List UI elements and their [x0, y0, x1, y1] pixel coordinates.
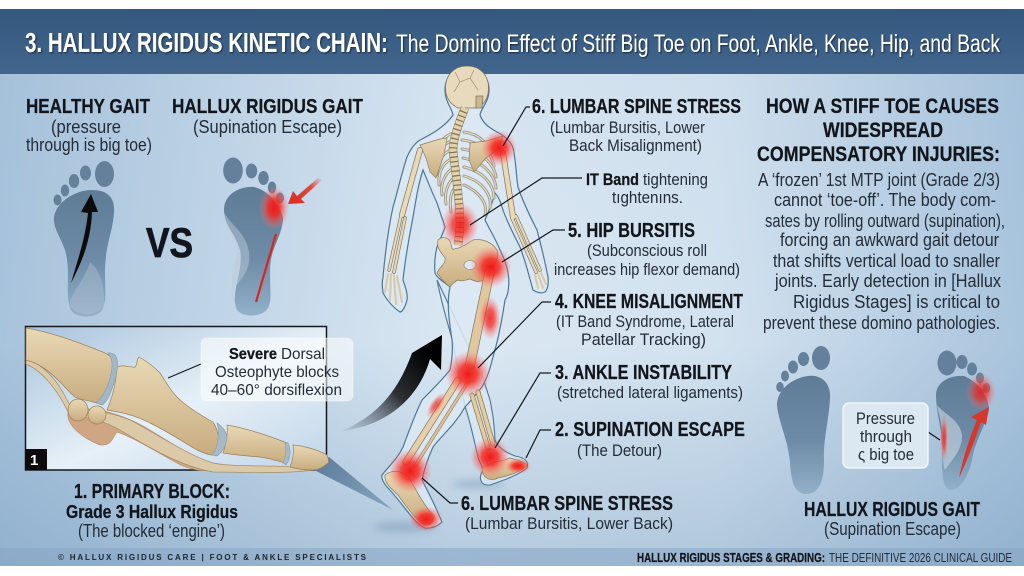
- icon: hot spot: [966, 373, 996, 411]
- text: primary block caption: [66, 481, 238, 541]
- icon: hot spot: [259, 186, 289, 230]
- title: 3. HALLUX RIGIDUS KINETIC CHAIN:: [25, 27, 388, 58]
- text block: explanation: cannot ‘toe-off’. The body com-: [774, 190, 996, 210]
- icon: pressure arrow: [71, 194, 98, 283]
- arrow: kinetic chain: [342, 335, 442, 431]
- footer bar: [0, 548, 1024, 566]
- ribcage: [437, 132, 496, 215]
- label: knee misalignment: (IT Band Syndrome, Lateral: [556, 312, 734, 331]
- text block: explanation: joints. Early detection in [Hallux: [774, 271, 1001, 291]
- foot bones front: [385, 471, 433, 525]
- text: primary block caption: (The blocked ‘engine’): [78, 521, 225, 541]
- heading: healthy gait: through is big toe): [26, 135, 152, 155]
- heading: how a stiff toe: WIDESPREAD: [823, 119, 943, 142]
- text block: explanation: that shifts vertical load to snaller: [773, 251, 1000, 271]
- spine: [453, 108, 465, 245]
- label: knee misalignment: [555, 291, 743, 349]
- wedge pointer: [314, 457, 393, 510]
- header banner: [0, 9, 1024, 74]
- text: lower foot caption: HALLUX RIGIDUS GAIT: [804, 499, 980, 521]
- leg bones: [406, 270, 493, 466]
- label: supination escape: (The Detour): [577, 441, 662, 460]
- heading: healthy gait: HEALTHY GAIT: [26, 96, 150, 118]
- label: it band: tıghtenıns.: [612, 188, 683, 207]
- callout: severe dorsal osteophyte: Severe: [229, 346, 277, 363]
- label: ankle instability: [555, 362, 743, 402]
- label: knee misalignment: 4. KNEE MISALIGNMENT: [555, 291, 743, 313]
- label: hip bursitis: increases hip flexor demand): [554, 260, 740, 279]
- pelvis: [437, 238, 498, 287]
- label: lumbar spine stress: [532, 96, 741, 155]
- icon: red arrow: [288, 178, 322, 204]
- label: hip bursitis: 5. HIP BURSITIS: [568, 220, 695, 242]
- heading: hallux rigidus gait: (Supination Escape): [193, 117, 342, 137]
- text: lower foot caption: [804, 499, 980, 539]
- icon: lower healthy foot: [776, 346, 830, 494]
- injury hot spots: [388, 130, 531, 532]
- label: ankle instability: 3. ANKLE INSTABILITY: [555, 362, 733, 384]
- callout: severe dorsal osteophyte: 40–60° dorsiflexion: [211, 382, 342, 399]
- label: lumbar spine stress: (Lumbar Bursitis, Lower: [550, 118, 705, 137]
- text: primary block caption: Grade 3 Hallux Rigidus: [66, 502, 238, 522]
- text block: explanation: forcing an awkward gait detour: [780, 230, 999, 250]
- foot bones rear: [482, 458, 527, 480]
- back leg silhouette: [437, 280, 528, 485]
- label: ankle instability: (stretched lateral ligaments): [557, 383, 743, 402]
- footer right title: [637, 550, 1012, 565]
- callout: pressure through big toe: [843, 403, 928, 468]
- ground shadows: [373, 480, 504, 532]
- icon: hallux rigidus foot: [223, 158, 322, 316]
- title: [25, 27, 1000, 58]
- callout: severe dorsal osteophyte: [201, 338, 353, 401]
- icon: lower hallux rigidus foot: [936, 350, 996, 490]
- icon: red arrow: [959, 407, 989, 478]
- callout: pressure through big toe: ς big toe: [858, 445, 914, 464]
- heading: hallux rigidus gait: [172, 96, 363, 137]
- front body silhouette: [382, 68, 548, 528]
- number tag: 1: [30, 452, 38, 469]
- callout: severe dorsal osteophyte: Dorsal: [281, 346, 325, 363]
- heading: healthy gait: [26, 96, 152, 155]
- text: vs: VS: [146, 219, 193, 266]
- label: supination escape: [555, 419, 745, 460]
- icon: lateral strain: [940, 414, 948, 462]
- label: hip bursitis: [554, 220, 740, 279]
- text: primary block caption: 1. PRIMARY BLOCK:: [74, 481, 230, 503]
- label: lumbar spine stress lower: (Lumbar Bursitis, Lower Back): [465, 514, 673, 533]
- text block: explanation: [758, 170, 1005, 333]
- label: it band: tightening: [643, 170, 708, 189]
- label: lumbar spine stress lower: 6. LUMBAR SPINE STRESS: [461, 493, 673, 515]
- illustration: foot bones: [26, 328, 329, 472]
- shoulder blades and collar: [420, 136, 503, 178]
- arm bones: [385, 150, 546, 304]
- footer left credit: © HALLUX RIGIDUS CARE | FOOT & ANKLE SPECIALISTS: [58, 553, 367, 562]
- number tag: [25, 449, 47, 470]
- leader lines: [422, 107, 582, 503]
- label: supination escape: 2. SUPINATION ESCAPE: [555, 419, 745, 441]
- callout: severe dorsal osteophyte: Osteophyte blocks: [215, 364, 339, 381]
- panel: primary block: [25, 326, 393, 510]
- label: lumbar spine stress: 6. LUMBAR SPINE STRESS: [532, 96, 741, 118]
- label: it band: [586, 170, 708, 207]
- callout: pressure through big toe: Pressure: [856, 409, 915, 428]
- callout: pressure through big toe: through: [860, 427, 912, 446]
- text block: explanation: Rigidus Stages] is critical to: [793, 292, 1000, 312]
- label: lumbar spine stress lower: [461, 493, 673, 533]
- label: it band: IT Band: [586, 170, 639, 189]
- text: lower foot caption: (Supination Escape): [824, 519, 961, 539]
- label: lumbar spine stress: Back Misalignment): [569, 136, 702, 155]
- pelvis foramen: [464, 260, 476, 270]
- heading: healthy gait: (pressure: [51, 117, 121, 137]
- label: hip bursitis: (Subconscious roll: [587, 241, 707, 260]
- label: knee misalignment: Patellar Tracking): [581, 330, 706, 349]
- skull: [446, 66, 488, 108]
- figure: walking skeleton: [373, 66, 548, 532]
- heading: how a stiff toe: [757, 95, 1000, 166]
- icon: healthy foot: [54, 161, 114, 317]
- heading: hallux rigidus gait: HALLUX RIGIDUS GAIT: [172, 96, 363, 118]
- footer right title: HALLUX RIGIDUS STAGES & GRADING:: [637, 550, 825, 565]
